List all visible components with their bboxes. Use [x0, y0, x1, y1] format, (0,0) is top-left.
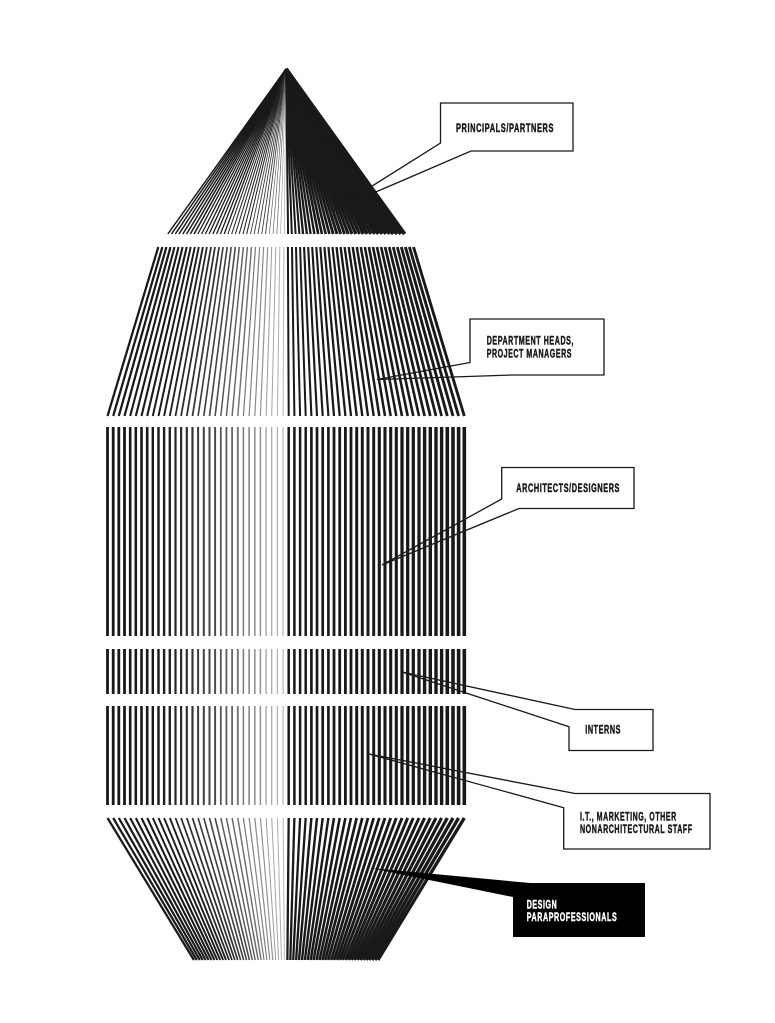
tier: interns bars	[108, 649, 464, 694]
tier: architects/designers bars	[108, 427, 464, 636]
callout: I.T., marketing, other nonarchitectural staff: I.T., MARKETING, OTHER	[580, 809, 677, 823]
tier: I.T., marketing, other staff bars	[108, 706, 464, 805]
callout: interns: INTERNS	[585, 722, 621, 736]
callout: department heads, project managers: PROJECT MANAGERS	[487, 346, 572, 360]
callout: architects/designers	[382, 468, 634, 565]
callout: design paraprofessionals	[370, 868, 645, 937]
callout: principals/partners	[334, 103, 573, 210]
tier: principals/partners triangle	[168, 69, 405, 234]
callout: design paraprofessionals: PARAPROFESSIONALS	[527, 910, 617, 924]
callout: architects/designers: ARCHITECTS/DESIGNERS	[516, 481, 620, 495]
callout: I.T., marketing, other nonarchitectural staff: NONARCHITECTURAL STAFF	[580, 822, 693, 836]
tier: department heads trapezoid	[108, 247, 464, 416]
callout: design paraprofessionals: DESIGN	[527, 898, 557, 912]
callout: interns	[402, 672, 653, 750]
callout: principals/partners: PRINCIPALS/PARTNERS	[456, 121, 554, 135]
tier: design paraprofessionals trapezoid	[108, 818, 464, 960]
callout: department heads, project managers: DEPARTMENT HEADS,	[487, 334, 574, 348]
callout: department heads, project managers	[377, 319, 604, 380]
callout: I.T., marketing, other nonarchitectural staff	[369, 754, 710, 849]
